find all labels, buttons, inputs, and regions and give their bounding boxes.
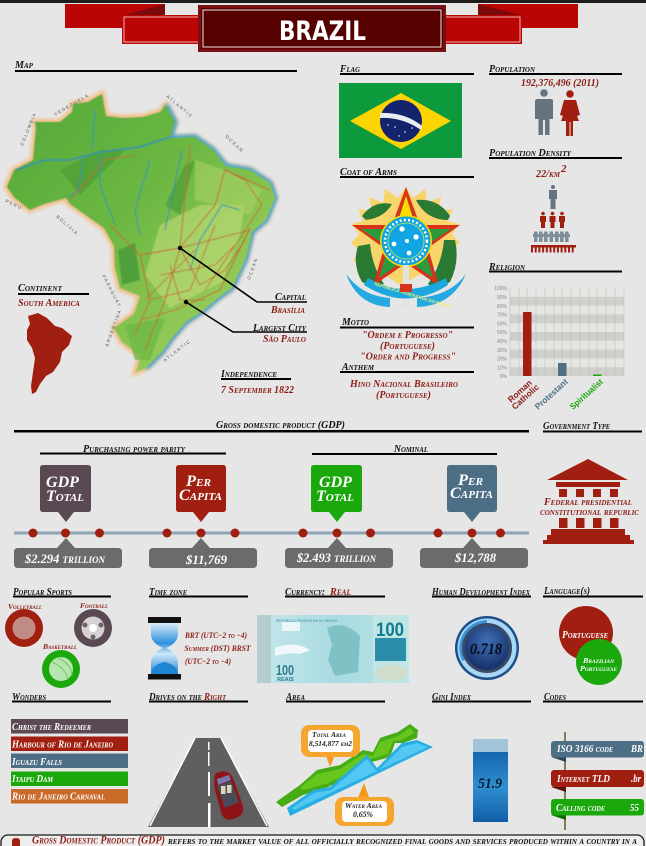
bar chart: 0% <box>500 374 508 380</box>
callout: GDP total PPP: Total <box>46 488 84 505</box>
icon: hourglass <box>148 617 181 680</box>
wonders: Wonders <box>12 692 46 703</box>
independence: Independence <box>220 369 277 380</box>
bar chart: 70% <box>497 312 508 318</box>
bar chart: 90% <box>497 295 508 301</box>
gini index <box>432 692 531 822</box>
icon: football <box>74 609 112 647</box>
time zone <box>148 587 251 680</box>
bar chart: Catholic <box>510 382 541 411</box>
population: 192,376,496 (2011) <box>521 78 599 89</box>
ribbon: calling code: 55 <box>630 803 639 814</box>
coat of arms emblem: REPÚBLICA FEDERATIVA DO BRASIL <box>374 280 453 310</box>
PPP subheading: Purchasing power parity <box>83 444 186 455</box>
population density: Population Density <box>489 148 572 159</box>
time zone: BRT (UTC−2 to −4) <box>184 630 247 640</box>
value: $2.294 trillion: $2.294 trillion <box>24 552 106 566</box>
anthem: Hino Nacional Brasileiro <box>349 379 458 390</box>
bar chart: 60% <box>497 322 508 328</box>
callout: water area <box>335 783 394 826</box>
callout: per capita PPP <box>176 465 226 522</box>
capital callout: Brasília <box>270 305 305 316</box>
government type: Government Type <box>543 421 610 432</box>
banknote: 100 <box>276 662 294 679</box>
3D area chart <box>276 724 433 816</box>
ribbon: internet TLD: Internet TLD <box>556 774 610 785</box>
callout: total area <box>301 725 360 767</box>
drives on the right: Drives on the <box>148 692 202 703</box>
time zone: Summer (DST) BRST <box>184 643 251 653</box>
bar chart: 50% <box>497 330 508 336</box>
title banner <box>65 4 578 52</box>
continent: South America <box>18 298 80 309</box>
religion: Religion <box>488 262 526 273</box>
map labels: COLOMBIA <box>19 111 37 146</box>
value: $2.493 trillion <box>285 538 393 568</box>
popular sports <box>5 587 112 688</box>
GDP heading: Gross domestic product (GDP) <box>216 420 345 431</box>
callout: GDP total nominal: GDP <box>319 474 352 491</box>
bar chart: 20% <box>497 356 508 362</box>
continent <box>18 283 89 394</box>
largest city callout: Largest City <box>252 323 307 334</box>
nominal subheading: Nominal <box>393 444 428 455</box>
value: $11,769: $11,769 <box>185 552 227 567</box>
gini index: Gini Index <box>432 692 471 703</box>
currency <box>257 586 409 683</box>
codes: Codes <box>544 692 566 703</box>
title text: BRAZIL <box>279 16 366 47</box>
motto: Motto <box>341 317 369 328</box>
icon: red pin <box>12 838 20 846</box>
footnote <box>1 834 644 846</box>
area: Area <box>285 692 305 703</box>
ribbon: calling code: Calling code <box>556 803 605 814</box>
callout: per capita nominal: Per <box>457 472 483 489</box>
map labels: OCEAN <box>246 257 259 280</box>
bar chart: 80% <box>497 304 508 310</box>
icon: man <box>535 89 553 135</box>
bar chart: 100% <box>494 286 508 292</box>
banknote <box>257 615 409 683</box>
callout: GDP total nominal: Total <box>316 488 354 505</box>
list item: Harbour of Rio de Janeiro <box>11 740 113 750</box>
anthem <box>340 362 474 401</box>
independence: 7 September 1822 <box>221 385 294 396</box>
government type: Federal presidential <box>543 497 632 508</box>
value: $12,788 <box>420 538 528 568</box>
time zone: (UTC−2 to −4) <box>185 656 231 666</box>
motto: (Portuguese) <box>380 341 435 352</box>
human development index <box>431 587 531 680</box>
motto <box>340 317 474 362</box>
government type: constitutional republic <box>540 507 639 518</box>
flag of Brazil <box>339 83 462 158</box>
callout: water area: 0.65% <box>353 810 373 819</box>
anthem: (Portuguese) <box>376 390 431 401</box>
callout: per capita PPP: Per <box>185 473 211 490</box>
venn: Brazilian Portuguese: Portuguese <box>580 664 618 673</box>
callout: per capita nominal: Capita <box>450 485 493 502</box>
motto: "Ordem e Progresso" <box>362 330 453 341</box>
GDP timeline <box>14 528 529 538</box>
list item: Iguazu Falls <box>11 757 62 768</box>
venn: Brazilian Portuguese <box>576 639 622 685</box>
map labels: PERU <box>5 198 23 211</box>
map labels: BOLIVIA <box>55 214 79 236</box>
heading: map: Map <box>14 60 34 71</box>
ribbon: internet TLD: .br <box>631 774 641 785</box>
list item: Itaipu Dam <box>11 774 54 785</box>
coat of arms section: Coat of Arms <box>340 167 397 178</box>
road <box>148 738 269 827</box>
list item: Christ the Redeemer <box>12 722 91 733</box>
icon: woman <box>560 90 580 136</box>
ribbon: internet TLD <box>551 770 644 792</box>
religion <box>488 262 624 411</box>
callout: per capita nominal <box>447 465 497 522</box>
bar chart: Spiritualist <box>568 377 605 411</box>
popular sports: Basketball <box>42 642 77 651</box>
ribbon: ISO code <box>551 741 644 762</box>
list item: Rio de Janeiro Carnaval <box>11 792 105 802</box>
icon: government building <box>543 459 634 544</box>
population density: 22/km <box>535 169 561 180</box>
largest city callout <box>184 300 307 345</box>
callout: GDP total nominal <box>311 465 362 522</box>
human development index: Human Development Index <box>431 587 530 598</box>
languages: Language(s) <box>543 586 590 597</box>
banknote: REAIS <box>277 677 294 683</box>
map labels <box>5 92 259 363</box>
popular sports: Volleyball <box>8 602 42 611</box>
bar chart: Protestant <box>533 377 570 411</box>
currency: Real <box>329 586 351 598</box>
drives on the right: Right <box>203 692 227 703</box>
icon: pyramid of people <box>531 185 576 252</box>
independence <box>220 369 294 396</box>
icon: South America silhouette <box>27 313 72 394</box>
value: $2.493 trillion: $2.493 trillion <box>296 551 376 565</box>
icon: red car <box>214 771 243 820</box>
population: Population <box>489 64 536 75</box>
wonders <box>11 692 128 804</box>
coat of arms section <box>340 167 474 310</box>
map labels: ARGENTINA <box>104 308 123 347</box>
anthem: Anthem <box>341 362 375 373</box>
ribbon: ISO code: ISO 3166 code <box>556 744 613 755</box>
value: $2.294 trillion <box>14 538 122 568</box>
value: $12,788: $12,788 <box>454 550 496 565</box>
banknote: 100 <box>376 620 404 641</box>
map labels: OCEAN <box>224 134 245 154</box>
ribbon: calling code <box>551 799 644 820</box>
callout: GDP total PPP: GDP <box>46 474 79 491</box>
time zone: Time zone <box>149 587 187 598</box>
venn: Portuguese: Portuguese <box>562 630 608 641</box>
callout: total area: Total Area <box>312 730 347 739</box>
icon: volleyball <box>5 609 43 647</box>
gauge: 0.718 <box>470 641 502 658</box>
bar chart: 40% <box>497 339 508 345</box>
gini gauge bar: 51.9 <box>478 776 502 792</box>
population <box>489 64 622 136</box>
area <box>276 692 433 826</box>
callout: per capita PPP: Capita <box>179 487 222 504</box>
capital callout <box>178 246 307 316</box>
ribbon: ISO code: BR <box>630 744 643 755</box>
map labels: ATLANTIC <box>165 94 194 119</box>
map labels: VENEZUELA <box>53 92 90 117</box>
bar chart <box>494 286 624 411</box>
languages <box>543 586 643 685</box>
flag section: Flag <box>339 64 360 75</box>
capital callout: Capital <box>275 292 306 303</box>
callout: GDP total PPP <box>40 465 91 522</box>
popular sports: Popular Sports <box>13 587 72 598</box>
population density <box>489 148 622 252</box>
map labels: ATLANTIC <box>163 338 192 363</box>
callout: water area: Water Area <box>345 801 383 810</box>
continent: Continent <box>18 283 63 294</box>
banknote: REPÚBLICA FEDERATIVA DO BRASIL <box>276 619 338 623</box>
icon: basketball <box>42 650 80 688</box>
largest city callout: São Paulo <box>263 334 306 345</box>
government type <box>540 421 642 544</box>
currency: Currency: <box>285 587 325 598</box>
codes <box>543 692 644 830</box>
value: $11,769 <box>149 538 257 568</box>
callout: total area: 8,514,877 km2 <box>309 739 352 748</box>
bar chart: 10% <box>497 366 508 372</box>
flag section <box>339 64 474 158</box>
coat of arms emblem <box>346 187 466 310</box>
bar chart: 30% <box>497 348 508 354</box>
map of Brazil <box>5 92 275 372</box>
ribbon pole <box>564 732 566 830</box>
population density: 2 <box>560 163 567 175</box>
venn: Brazilian Portuguese: Brazilian <box>582 656 614 665</box>
drives on the right <box>148 692 269 827</box>
bar chart: Roman <box>506 378 534 404</box>
popular sports: Football <box>80 601 108 610</box>
motto: "Order and Progress" <box>360 352 456 362</box>
map labels: PARAGUAY <box>101 274 123 309</box>
